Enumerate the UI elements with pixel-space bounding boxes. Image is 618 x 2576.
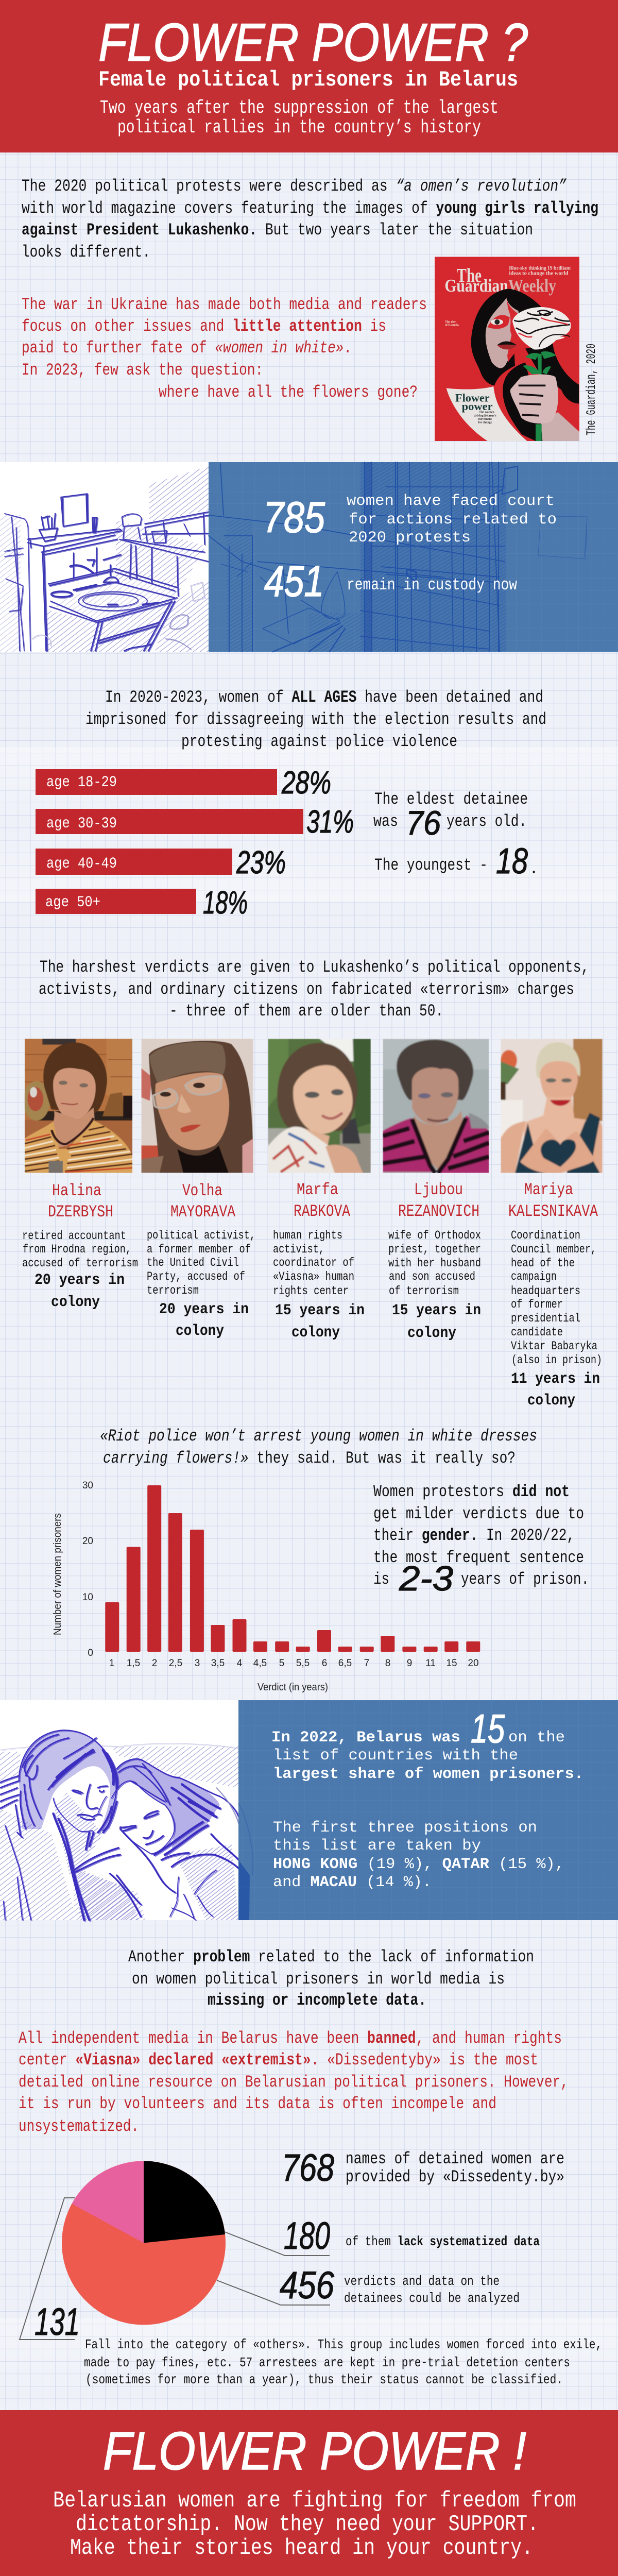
x axis labels: 2,5 — [169, 1658, 182, 1669]
x axis labels: 5 — [279, 1658, 284, 1669]
magazine cover: The women — [479, 411, 494, 414]
verdict: 15 years in — [392, 1302, 481, 1319]
verdict: colony — [527, 1392, 575, 1410]
age intro text: In 2020-2023, women of ALL AGES have been detained and — [105, 688, 543, 707]
chart: verdict length histogram — [52, 1480, 480, 1693]
description: coordinator of — [273, 1256, 354, 1269]
red text: independent media: center «Viasna» declared «extremist». «Dissedentyby» is the most — [19, 2050, 538, 2070]
sketch lines — [0, 1730, 238, 1920]
magazine cover: driving Belarus’s — [474, 414, 497, 417]
call to action: dictatorship. Now they need your SUPPORT. — [76, 2512, 539, 2537]
description: head of the — [511, 1257, 575, 1270]
stat: 456 analyzed: verdicts and data on the — [344, 2274, 500, 2289]
panel: prison sink sketch — [0, 462, 210, 652]
magazine cover: for change — [478, 421, 492, 425]
magazine cover: movement — [478, 418, 492, 421]
profile: Mariya Kalesnikava — [508, 1180, 602, 1410]
description: accused of terrorism — [22, 1257, 138, 1270]
intro text: with world magazine covers featuring the images of young girls rallying — [22, 199, 598, 218]
verdict — [159, 1301, 249, 1340]
magazine cover: The rise — [445, 321, 456, 324]
description: terrorism — [147, 1284, 199, 1297]
eldest and youngest detainee callout: The eldest detainee — [374, 790, 528, 809]
rank text: on the — [508, 1729, 565, 1747]
photo: Halina Dzerbysh — [23, 1039, 132, 1173]
verdict: colony — [291, 1324, 340, 1342]
callout: most frequent sentence: is — [373, 1570, 389, 1589]
verdict: colony — [51, 1294, 100, 1311]
magazine cover: The — [457, 264, 482, 286]
name — [294, 1180, 351, 1221]
verdict: 20 years in — [35, 1272, 125, 1289]
header description — [100, 97, 499, 138]
verdicts intro text: - three of them are older than 50. — [169, 1002, 443, 1021]
intro text: against President Lukashenko. But two years later the situation — [22, 221, 533, 240]
stat: 451: remain in custody now — [347, 575, 517, 595]
intro text: looks different. — [22, 243, 150, 262]
stat: 456 analyzed: detainees could be analyzed — [344, 2291, 520, 2306]
x axis labels: 4,5 — [253, 1658, 267, 1669]
rank text: In 2022, Belarus was — [271, 1729, 460, 1747]
bar: age 18-29 — [36, 765, 331, 801]
verdict — [511, 1370, 600, 1410]
intro text: The 2020 political protests were described as “a omen’s revolution” — [22, 177, 567, 196]
description: candidate — [511, 1326, 563, 1339]
stat: 131 others — [35, 2300, 602, 2387]
description: retired accountant — [22, 1229, 126, 1243]
age intro text: protesting against police violence — [181, 732, 457, 751]
name — [398, 1180, 479, 1221]
top three text: HONG KONG (19 %), QATAR (15 %), — [273, 1856, 564, 1873]
x axis labels: 5,5 — [296, 1658, 310, 1669]
magazine cover: Guardian — [444, 276, 508, 296]
description: Viktar Babaryka — [511, 1340, 597, 1353]
verdict: 11 years in — [511, 1370, 600, 1388]
name — [508, 1180, 598, 1221]
eldest and youngest detainee callout — [373, 790, 539, 881]
rank text — [271, 1706, 583, 1783]
description: the United Civil — [147, 1256, 239, 1269]
description — [273, 1229, 354, 1298]
bar: age 50+: age 50+ — [45, 894, 100, 911]
leader lines — [20, 2198, 330, 2340]
pie chart — [20, 2161, 330, 2340]
magazine cover: Flower — [455, 391, 490, 404]
bars — [105, 1485, 480, 1652]
stat: 768 names: 768 — [282, 2146, 334, 2189]
callout: most frequent sentence: 2-3 — [399, 1559, 453, 1598]
y axis labels: 20 — [82, 1536, 93, 1547]
red text: little attention: In 2023, few ask the question: — [22, 361, 263, 380]
name: Mariya — [524, 1180, 573, 1199]
verdict: 20 years in — [159, 1301, 249, 1318]
eldest and youngest detainee callout: years old. — [447, 812, 527, 831]
x axis labels: 7 — [364, 1658, 369, 1669]
eldest and youngest detainee callout: 18 — [496, 841, 528, 881]
stat: 451: 451 — [264, 557, 324, 605]
name: Halina — [52, 1181, 101, 1200]
description: «Viasna» human — [273, 1270, 354, 1283]
photo: Ljubou Rezanovich — [383, 1039, 489, 1173]
bar chart: detainees by age — [36, 765, 354, 921]
callout: most frequent sentence: Women protestors did not — [373, 1482, 570, 1501]
verdict: colony — [407, 1325, 456, 1342]
red text: little attention: focus on other issues and little attention is — [22, 317, 386, 336]
verdicts intro text — [39, 958, 589, 1021]
panel: custody numbers — [209, 462, 618, 652]
problem text — [128, 1947, 534, 2010]
x axis labels: 6,5 — [338, 1658, 352, 1669]
bar: age 30-39: 31% — [306, 804, 354, 840]
quote: riot police: «Riot police won’t arrest young women in white dresses — [100, 1427, 537, 1446]
magazine cover: power — [462, 400, 493, 413]
stat: 456 analyzed: 456 — [280, 2264, 335, 2307]
stat: 785 — [263, 493, 557, 547]
slice: analyzed — [62, 2161, 226, 2325]
red text: independent media: unsystematized. — [19, 2117, 139, 2136]
name — [48, 1181, 113, 1222]
magazine cover: of Kamala — [445, 324, 459, 327]
y axis labels: 10 — [82, 1592, 93, 1603]
description: Party, accused of — [147, 1270, 245, 1283]
intro text — [22, 177, 598, 262]
x axis labels: 6 — [322, 1658, 327, 1669]
problem text: missing or incomplete data. — [208, 1991, 426, 2010]
call to action: Make their stories heard in your country. — [70, 2535, 533, 2561]
closing title: FLOWER POWER ! — [103, 2421, 526, 2481]
description: wife of Orthodox — [388, 1229, 481, 1242]
stat: 768 names — [282, 2146, 564, 2189]
x axis labels: 15 — [446, 1658, 457, 1669]
call to action — [53, 2488, 576, 2561]
eldest and youngest detainee callout: was — [373, 812, 398, 831]
header description: Two years after the suppression of the largest — [100, 97, 499, 118]
bar: age 50+: 18% — [203, 885, 248, 921]
cover credit: The Guardian, 2020 — [584, 344, 599, 435]
name: Volha — [182, 1181, 222, 1200]
red text: little attention: paid to further fate of «women in white». — [22, 338, 352, 358]
name: REZANOVICH — [398, 1202, 479, 1221]
callout: most frequent sentence — [373, 1482, 589, 1598]
name: MAYORAVA — [170, 1202, 236, 1222]
bar: age 18-29: age 18-29 — [46, 774, 117, 791]
stat: 180 without data — [284, 2214, 540, 2257]
x axis labels: 1 — [109, 1658, 114, 1669]
eldest and youngest detainee callout: The youngest - — [374, 856, 488, 875]
bar: age 40-49: 23% — [236, 845, 286, 880]
name: KALESNIKAVA — [508, 1202, 598, 1221]
description: political activist, — [147, 1229, 255, 1242]
description: Coordination — [511, 1229, 580, 1242]
magazine cover: ideas to change the world — [509, 270, 569, 276]
age intro text — [85, 688, 546, 751]
name — [170, 1181, 236, 1222]
description: of terrorism — [389, 1284, 459, 1298]
slice: others — [72, 2161, 144, 2243]
verdict — [392, 1302, 481, 1342]
name: Ljubou — [414, 1180, 463, 1199]
slice: lacking data — [144, 2161, 225, 2243]
header description: political rallies in the country’s history — [117, 117, 481, 138]
stat: 768 names: names of detained women are — [346, 2149, 564, 2168]
panel: share of women prisoners — [238, 1700, 618, 1920]
red text: little attention — [22, 295, 427, 402]
top three text: this list are taken by — [273, 1837, 481, 1855]
problem text: Another problem related to the lack of information — [128, 1947, 534, 1967]
subtitle: Female political prisoners in Belarus — [98, 67, 518, 92]
verdict: 15 years in — [275, 1302, 365, 1319]
description: of former — [511, 1298, 563, 1311]
footer banner — [0, 2410, 618, 2576]
y axis labels: 30 — [82, 1480, 93, 1491]
name: DZERBYSH — [48, 1202, 113, 1222]
x axis labels: 9 — [407, 1658, 412, 1669]
quote: riot police — [100, 1427, 537, 1468]
bar: age 40-49 — [36, 845, 286, 880]
x axis labels: 4 — [237, 1658, 243, 1669]
sketch lines — [5, 494, 209, 651]
description: a former member of — [147, 1243, 251, 1256]
magazine cover: Blue-sky thinking 19 brilliant — [509, 265, 571, 271]
rank text: largest share of women prisoners. — [273, 1766, 583, 1783]
verdict — [35, 1272, 125, 1311]
red text: independent media: All independent media in Belarus have been banned, and human rights — [19, 2029, 562, 2048]
x axis labels: 3,5 — [211, 1658, 225, 1669]
bar: age 30-39 — [36, 804, 354, 840]
description: presidential — [511, 1312, 580, 1325]
cell bars sketch — [209, 462, 587, 652]
profile: Halina Dzerbysh — [22, 1181, 138, 1311]
stat: 180 without data: 180 — [284, 2214, 330, 2257]
photo: Mariya Kalesnikava — [501, 1039, 603, 1173]
callout: most frequent sentence: their gender. In 2020/22, — [373, 1526, 575, 1545]
red text: independent media — [19, 2029, 569, 2136]
eldest and youngest detainee callout: . — [529, 859, 539, 878]
top three text — [273, 1819, 564, 1891]
description: activist, — [273, 1243, 324, 1256]
problem text: on women political prisoners in world media is — [132, 1970, 505, 1989]
profile: Ljubou Rezanovich — [388, 1180, 481, 1342]
stat: 785: for actions related to — [349, 511, 557, 529]
header banner — [0, 0, 618, 152]
profile: Volha Mayorava — [147, 1181, 255, 1340]
rank text: list of countries with the — [273, 1747, 518, 1765]
x axis labels: 3 — [195, 1658, 200, 1669]
bar: age 18-29: 28% — [281, 765, 331, 801]
x axis labels: 20 — [468, 1658, 479, 1669]
y axis title: Number of women prisoners — [52, 1513, 63, 1635]
quote: riot police: carrying flowers!» they said. But was it really so? — [103, 1449, 516, 1468]
description: rights center — [273, 1284, 349, 1298]
x axis labels: 11 — [425, 1658, 436, 1669]
red text: little attention: where have all the flowers gone? — [159, 383, 418, 402]
stat: 131 others: 131 — [35, 2300, 80, 2343]
stat: 456 analyzed — [280, 2264, 520, 2307]
description — [388, 1229, 481, 1298]
description — [511, 1229, 602, 1367]
name: Marfa — [297, 1180, 338, 1199]
red text: little attention: The war in Ukraine has made both media and readers — [22, 295, 427, 314]
description: with her husband — [388, 1257, 481, 1270]
x axis labels: 1,5 — [127, 1658, 140, 1669]
bar: age 40-49: age 40-49 — [46, 855, 117, 873]
bar: age 30-39: age 30-39 — [46, 815, 117, 833]
eldest and youngest detainee callout: 76 — [406, 804, 441, 842]
stat: 785: women have faced court — [347, 493, 555, 510]
verdict — [275, 1302, 365, 1342]
stat: 180 without data: of them lack systematized data — [346, 2234, 540, 2249]
y axis labels: 0 — [88, 1648, 93, 1658]
panel: two women sketch — [0, 1700, 239, 1921]
x axis labels — [109, 1658, 479, 1669]
verdict: colony — [176, 1323, 224, 1340]
top three text: and MACAU (14 %). — [273, 1874, 432, 1891]
description: campaign — [511, 1270, 557, 1283]
x axis labels: 8 — [385, 1658, 390, 1669]
x axis labels: 2 — [152, 1658, 157, 1669]
stat: 785: 2020 protests — [349, 529, 471, 547]
description: from Hrodna region, — [23, 1243, 131, 1256]
stat: 785: 785 — [263, 493, 325, 541]
rank text: 15 — [471, 1706, 505, 1751]
callout: most frequent sentence: years of prison. — [461, 1570, 589, 1589]
y axis labels — [82, 1480, 93, 1658]
description: and son accused — [389, 1270, 475, 1283]
description: priest, together — [388, 1243, 481, 1256]
title: FLOWER POWER ? — [98, 13, 528, 73]
x axis title: Verdict (in years) — [258, 1682, 328, 1693]
top three text: The first three positions on — [273, 1819, 537, 1837]
description: headquarters — [511, 1284, 580, 1298]
photo: Marfa Rabkova — [268, 1039, 371, 1173]
description — [22, 1229, 138, 1270]
description — [147, 1229, 255, 1297]
red text: independent media: it is run by volunteers and its data is often incompele and — [19, 2094, 496, 2113]
profile: Marfa Rabkova — [273, 1180, 365, 1342]
bar: age 50+ — [36, 885, 248, 921]
stat: 768 names: provided by «Dissedenty.by» — [346, 2167, 564, 2187]
name: RABKOVA — [294, 1202, 351, 1221]
photo: Volha Mayorava — [141, 1039, 253, 1173]
stat: 451 — [264, 557, 517, 605]
description: human rights — [273, 1229, 342, 1242]
magazine cover: Weekly — [508, 276, 556, 296]
description: Council member, — [511, 1243, 596, 1256]
magazine cover — [435, 257, 579, 441]
